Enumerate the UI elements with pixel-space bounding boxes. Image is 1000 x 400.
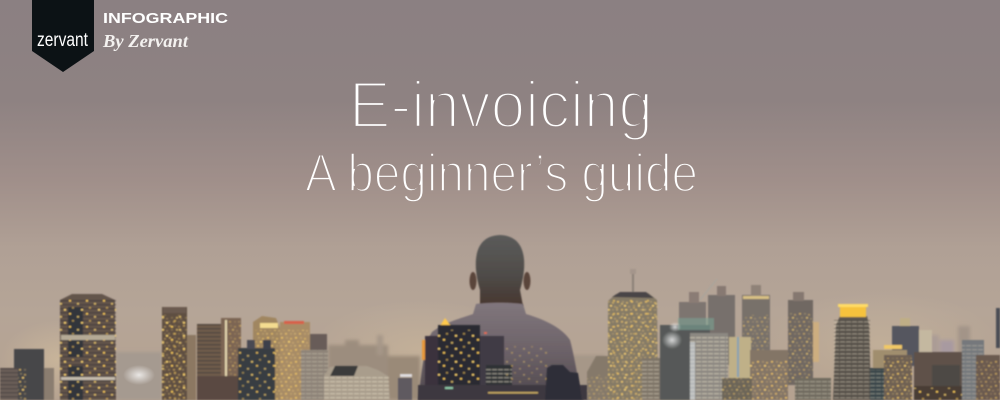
- dark tower front: [238, 340, 275, 400]
- dark low blocks: [418, 365, 588, 400]
- round tower: [60, 294, 116, 400]
- logo badge: [32, 0, 94, 72]
- left low buildings: [0, 349, 54, 400]
- skyline: buildings overlaid on the man: [418, 318, 588, 400]
- subtitle: A beginner’s guide: [305, 144, 698, 204]
- grey block: [301, 350, 328, 400]
- mid-left tower: [162, 307, 196, 400]
- grey towers: [742, 285, 819, 385]
- shirt and shoulders: [418, 302, 584, 400]
- gold crown tower: [833, 304, 871, 400]
- warm lit towers: [253, 316, 327, 400]
- skyline: right city blocks: [587, 269, 1000, 400]
- logo wordmark: zervant: [37, 30, 89, 51]
- low buildings left of antenna tower: [587, 356, 672, 400]
- gold tower crown: [422, 318, 452, 360]
- construction tower with crane: [660, 279, 735, 400]
- dark overlay tower: [425, 325, 512, 400]
- lower centre blocks: [722, 350, 831, 400]
- label: infographic: INFOGRAPHIC: [103, 11, 229, 27]
- lit specks on shirt: [504, 345, 548, 385]
- glow burst behind mid-left: [123, 365, 155, 385]
- brown towers: [197, 318, 241, 400]
- man seen from behind: [418, 235, 584, 400]
- antenna tower: [608, 269, 658, 400]
- label: by zervant: By Zervant: [102, 31, 189, 51]
- distant hazy buildings: [116, 326, 970, 400]
- right cluster: [870, 308, 1000, 400]
- striped low block with dark roof: [324, 366, 412, 400]
- skyline: left city blocks: [0, 294, 412, 400]
- title: E-invoicing: [349, 68, 653, 142]
- ears and head: [470, 235, 530, 306]
- light striped building: [690, 333, 751, 400]
